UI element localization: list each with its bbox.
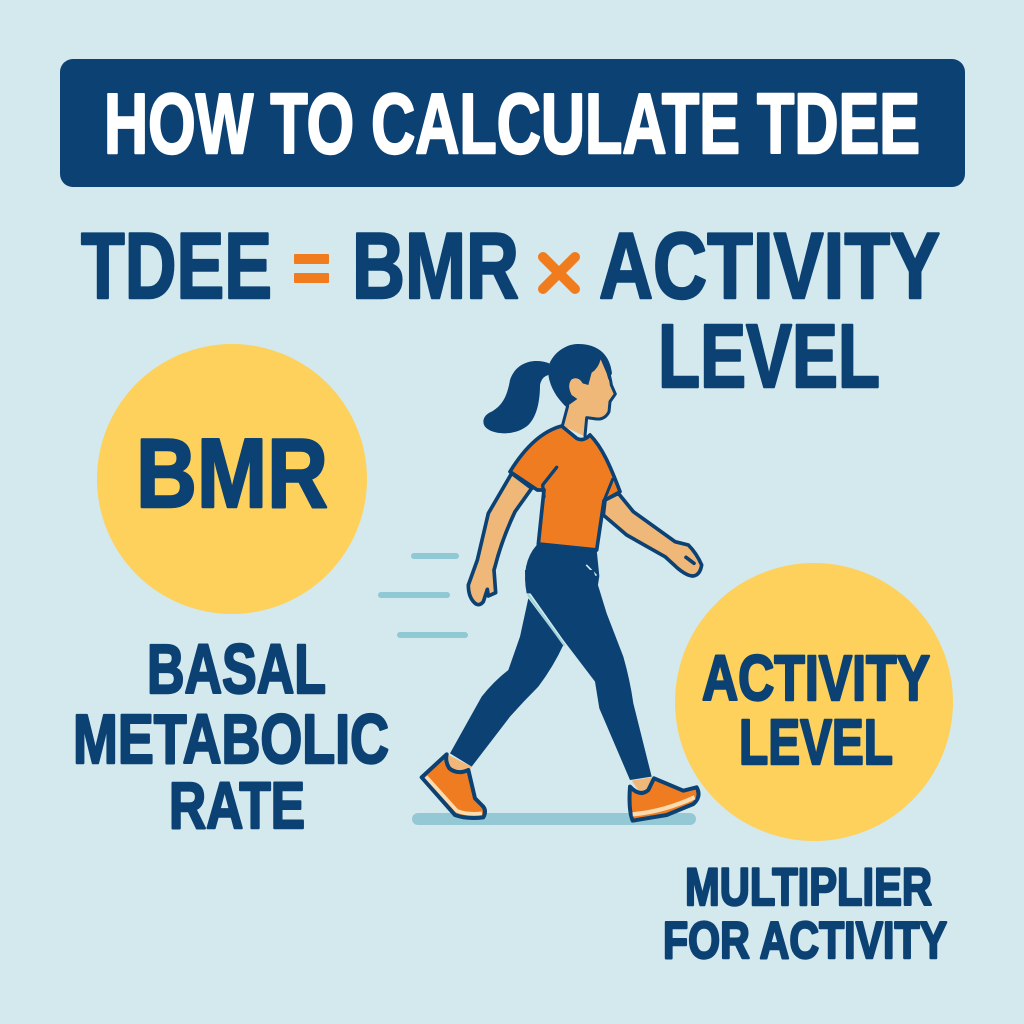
activity level description: MULTIPLIER	[685, 858, 932, 917]
formula	[81, 213, 940, 407]
face and neck	[563, 359, 614, 436]
ground line	[412, 813, 696, 825]
BMR label: BMR	[136, 418, 328, 528]
motion lines	[378, 553, 468, 638]
shirt	[510, 426, 620, 550]
front shoe	[630, 778, 699, 821]
equals sign	[294, 254, 329, 283]
back shoe	[422, 754, 485, 818]
ponytail	[483, 361, 549, 433]
back leg	[450, 598, 563, 767]
activity level description: FOR ACTIVITY	[663, 912, 947, 970]
waist and hips	[525, 545, 599, 593]
back ankle	[448, 755, 472, 775]
formula term: BMR: BMR	[352, 213, 519, 318]
walking woman illustration	[422, 344, 702, 821]
front ankle	[632, 777, 652, 793]
back arm and hand	[468, 473, 532, 605]
BMR circle	[97, 344, 367, 614]
formula term: ACTIVITY: ACTIVITY	[599, 213, 940, 318]
BMR description: RATE	[169, 768, 305, 842]
face outline	[562, 358, 615, 436]
multiply sign	[543, 257, 575, 289]
hair	[548, 344, 612, 407]
leg separator	[528, 595, 564, 645]
activity level description	[663, 858, 947, 970]
formula term: LEVEL: LEVEL	[658, 307, 880, 407]
back shoe sole	[426, 777, 482, 814]
activity level circle	[675, 563, 953, 841]
activity level circle: LEVEL	[739, 706, 893, 778]
front arm and hand	[603, 493, 702, 576]
front leg	[525, 570, 652, 780]
shirt fold	[543, 467, 557, 497]
front shoe sole	[633, 797, 695, 814]
BMR description: METABOLIC	[73, 700, 389, 778]
hip highlight	[587, 565, 596, 575]
activity level label: ACTIVITY	[702, 642, 930, 714]
BMR description	[73, 630, 389, 842]
title banner	[60, 59, 965, 187]
upper body	[468, 344, 702, 605]
BMR description: BASAL	[147, 630, 326, 708]
formula term: TDEE: TDEE	[81, 213, 272, 318]
lower body	[422, 570, 699, 821]
